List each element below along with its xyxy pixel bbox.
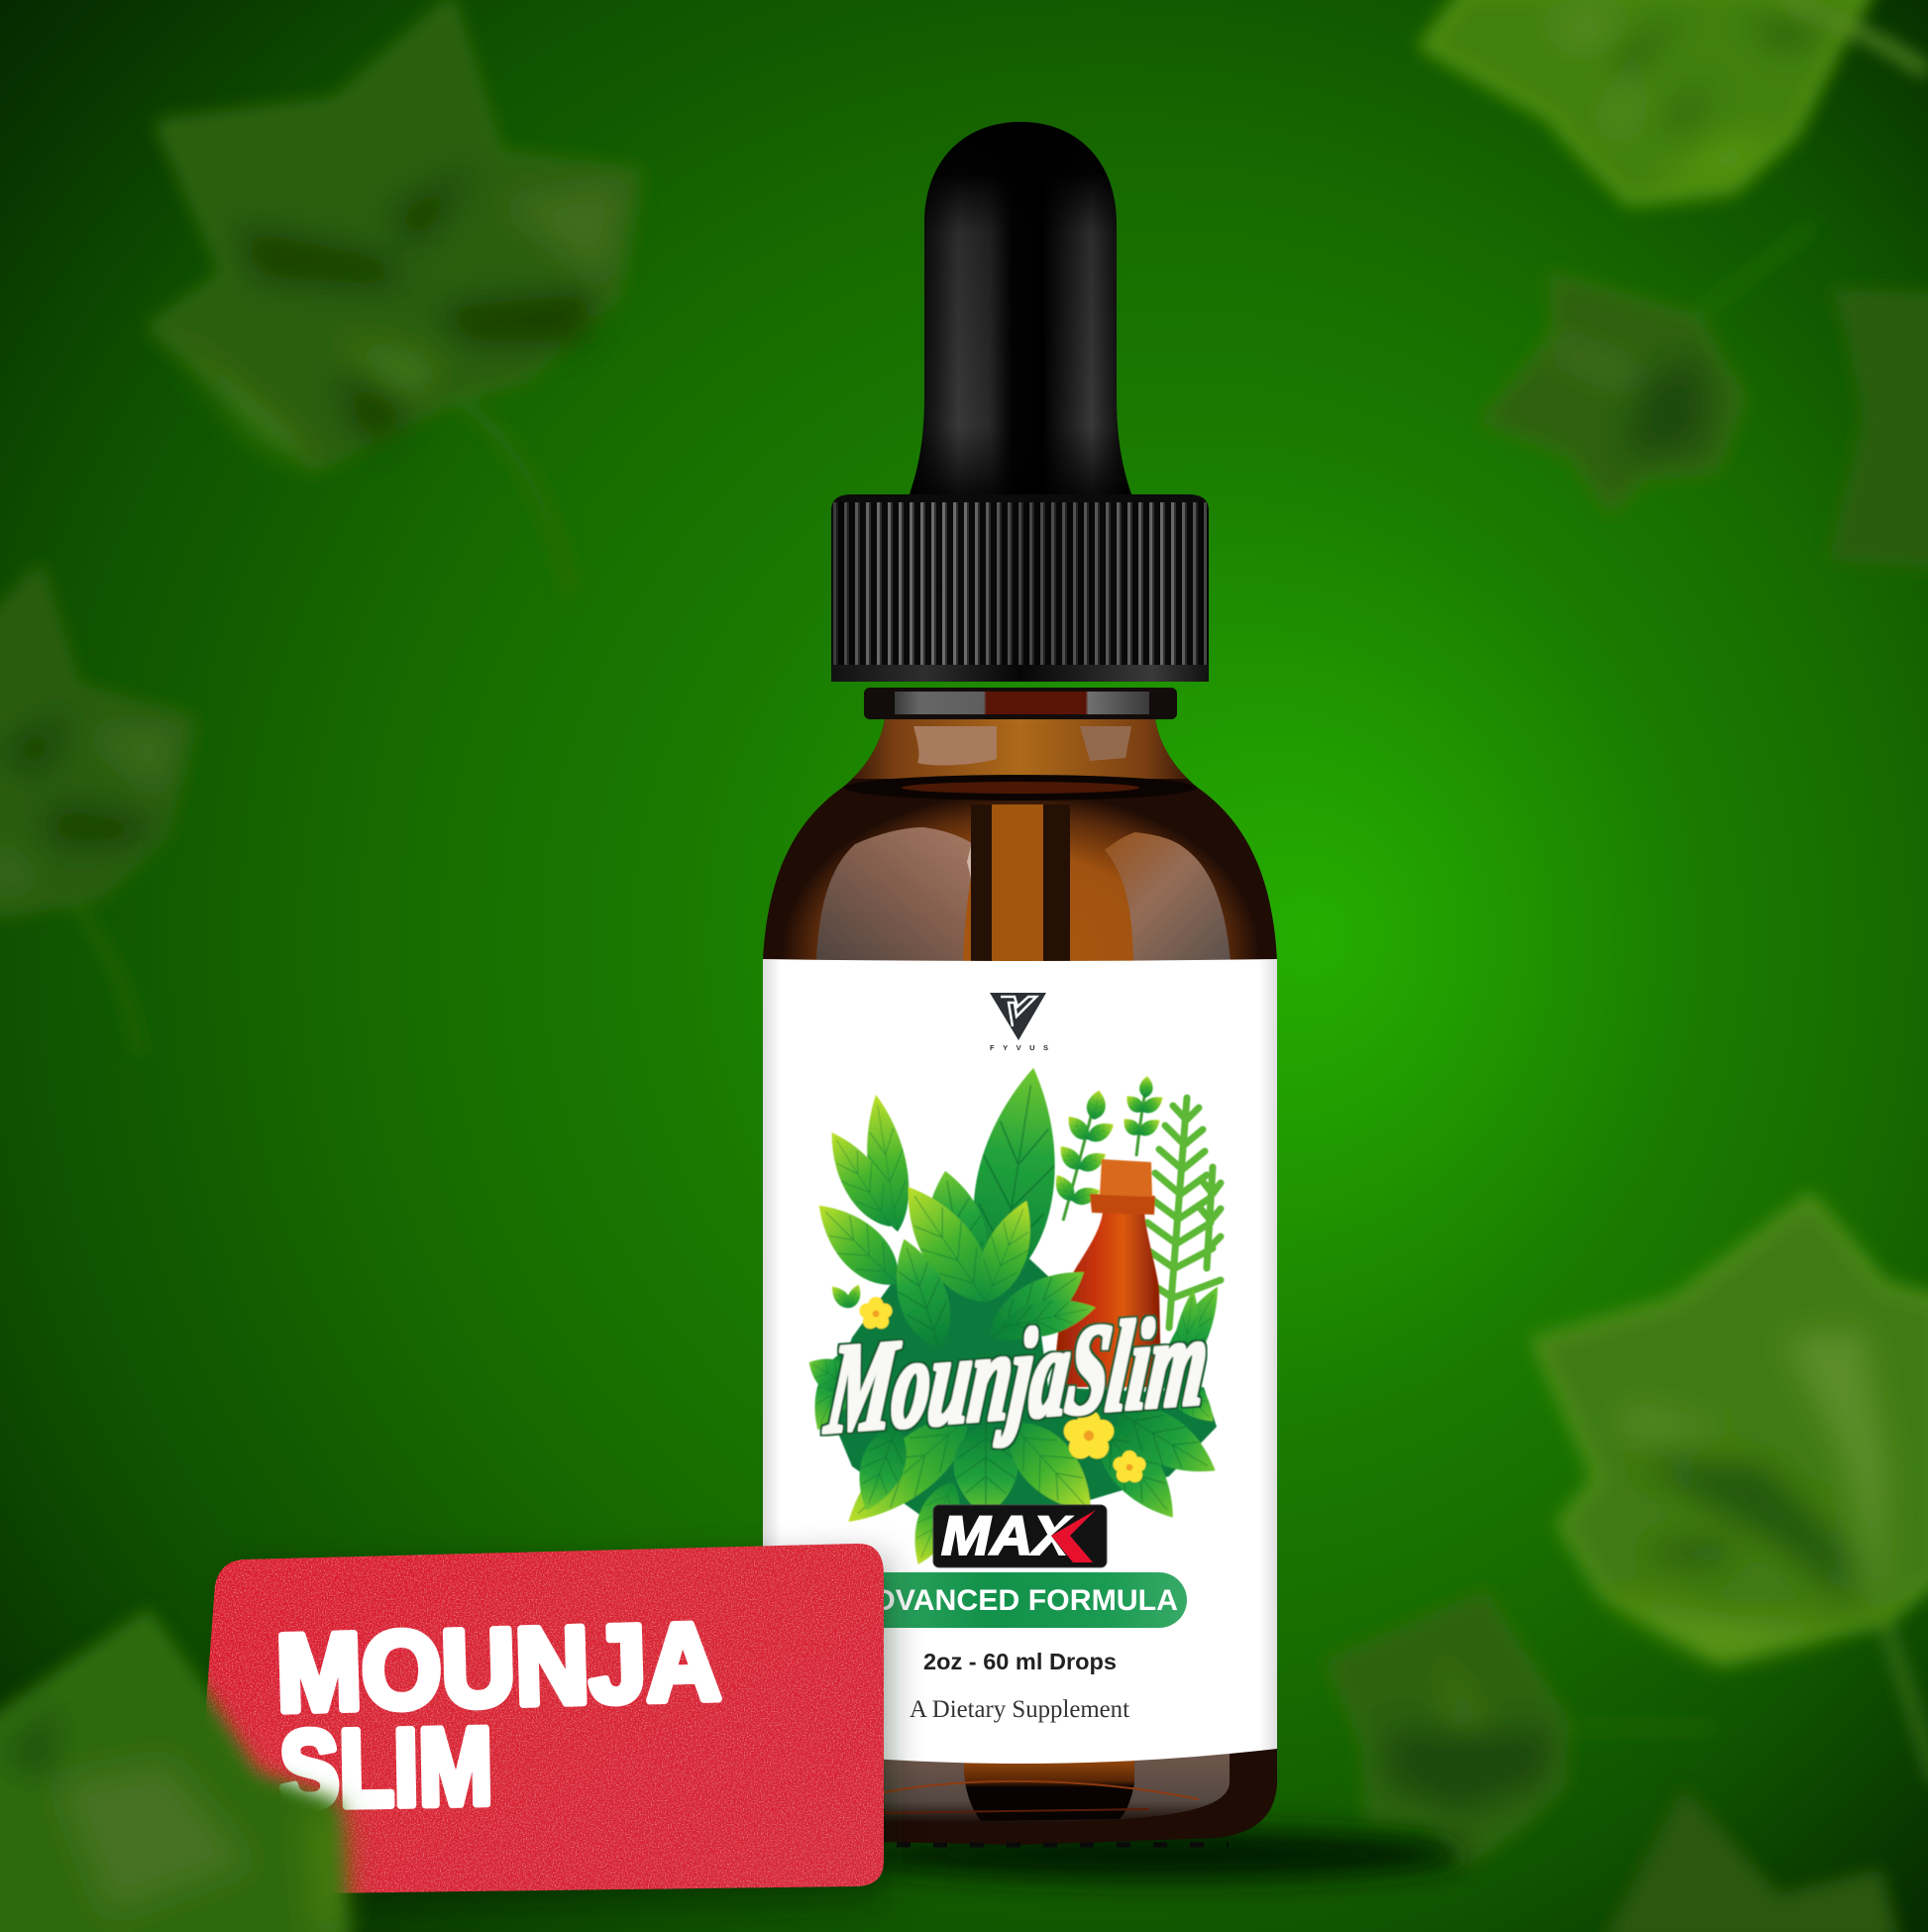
MAX badge: MAX: [941, 1504, 1076, 1566]
brand logo: [990, 993, 1048, 1052]
blurred leaf: lower middle right: [1329, 1594, 1717, 1863]
blurred leaf: far right: [1832, 292, 1928, 565]
red name card: [204, 1544, 884, 1894]
volume text: 2oz - 60 ml Drops: [923, 1649, 1117, 1674]
dropper bottle: [763, 122, 1277, 1845]
rubber dropper bulb: [910, 122, 1131, 494]
dietary supplement text: A Dietary Supplement: [910, 1696, 1129, 1723]
botanical illustration: [801, 1062, 1232, 1571]
advanced formula pill: ADVANCED FORMULA: [852, 1584, 1178, 1617]
fern sprigs: [827, 1075, 1221, 1328]
neck ring: [864, 688, 1177, 719]
bottle ground shadow: [852, 1829, 1466, 1880]
blurred leaf: left edge: [0, 569, 191, 1050]
card title: SLIM: SLIM: [278, 1705, 493, 1831]
MAX badge: [933, 1504, 1107, 1567]
advanced formula pill: [852, 1572, 1187, 1628]
blurred leaf: bottom right: [1606, 1791, 1896, 1932]
bottle base beading: [897, 1843, 1229, 1847]
foliage leaves: [801, 1062, 1232, 1571]
blurred leaf: large bottom right: [1537, 1198, 1928, 1783]
ribbed screw cap: [831, 494, 1209, 682]
brand script wordmark: MounjaSlim: [820, 1288, 1215, 1461]
blurred leaf: bottom left foreground: [0, 1614, 347, 1932]
blurred leaf: top right: [1425, 0, 1928, 201]
blurred leaf: top left: [151, 0, 637, 589]
small amber bottle: [1052, 1159, 1161, 1387]
red card shadow: [238, 1563, 884, 1914]
blurred leaf: upper right: [1483, 228, 1811, 512]
brand logo: FYVUS: [990, 1043, 1048, 1052]
white product label: [763, 959, 1277, 1764]
yellow flowers: [859, 1297, 1146, 1482]
glass body: [763, 719, 1277, 1845]
dark foliage base: [827, 1250, 1217, 1516]
card title: MOUNJA: MOUNJA: [274, 1600, 721, 1735]
